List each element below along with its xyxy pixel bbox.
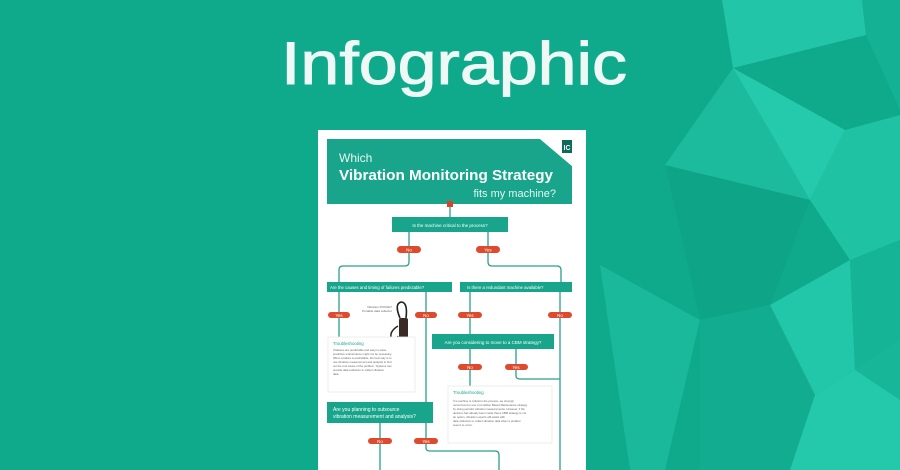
question: causes predictable: Are the causes and timing of failures predictable? xyxy=(330,285,425,290)
start marker xyxy=(447,201,453,207)
icon: portable data collector: Vibration POCKET xyxy=(367,305,392,309)
pills row 2: Yes xyxy=(466,313,474,318)
question: outsource: Are you planning to outsource xyxy=(333,407,400,413)
troubleshooting box right: recommend to use a Condition Based Maintenance strategy xyxy=(453,403,528,407)
troubleshooting box right: by doing periodic vibration measurements. However, if the xyxy=(453,407,525,411)
troubleshooting box left: When a failure is predictable, the best way is to xyxy=(333,356,392,360)
question: CBM strategy xyxy=(432,334,554,349)
question: outsource xyxy=(327,402,433,423)
icon: portable data collector: Portable data collector xyxy=(362,309,392,313)
pills row 1 xyxy=(397,246,500,253)
troubleshooting box right: an option, vibration experts will assist with xyxy=(453,415,505,419)
pills row 1: Yes xyxy=(484,248,492,252)
infographic card xyxy=(318,130,586,470)
pills row 1: No xyxy=(406,248,412,252)
question: redundant machine xyxy=(460,282,572,292)
question: causes predictable xyxy=(327,282,452,292)
question: outsource: vibration measurement and analysis? xyxy=(333,414,416,420)
troubleshooting box left: predictive maintenance might not be necessary. xyxy=(333,352,392,356)
pills row 4 xyxy=(368,438,438,444)
title: Infographic xyxy=(281,30,627,97)
question: CBM strategy: Are you considering to move to a CBM strategy? xyxy=(445,340,542,345)
troubleshooting box right: If a machine is critical to the process, we strongly xyxy=(453,399,514,403)
pills row 2: Yes xyxy=(335,313,343,318)
troubleshooting box left xyxy=(328,337,415,392)
pills row 2: No xyxy=(557,313,563,318)
pills row 2: No xyxy=(423,313,429,318)
troubleshooting box right: decision has already been made that a CBM strategy is not xyxy=(453,411,526,415)
question: machine critical: Is the machine critical to the process? xyxy=(412,223,488,228)
troubleshooting box right: seems to occur. xyxy=(453,423,473,427)
troubleshooting box left: out the root cause of the problem. Systems can xyxy=(333,364,392,368)
troubleshooting box left: provide data collection to collect vibration xyxy=(333,368,384,372)
icon: portable data collector xyxy=(362,302,408,344)
header banner: Vibration Monitoring Strategy xyxy=(339,167,554,184)
pills row 2 xyxy=(328,312,572,318)
pills row 3: Yes xyxy=(512,365,520,370)
troubleshooting box right: data collection to collect vibration data when a problem xyxy=(453,419,522,423)
pills row 3 xyxy=(458,364,528,370)
question: machine critical xyxy=(392,217,508,232)
header banner xyxy=(327,139,572,204)
troubleshooting box right: Troubleshooting xyxy=(453,390,484,395)
connector lines xyxy=(339,207,561,470)
pills row 3: No xyxy=(467,365,473,370)
header banner: fits my machine? xyxy=(473,188,556,200)
troubleshooting box right xyxy=(448,386,552,443)
troubleshooting box left: Troubleshooting xyxy=(333,341,364,346)
troubleshooting box left: data. xyxy=(333,372,339,376)
header banner: Which xyxy=(339,151,372,165)
pills row 4: Yes xyxy=(422,439,430,444)
pills row 4: No xyxy=(377,439,383,444)
background polygon pattern xyxy=(600,0,900,470)
question: redundant machine: Is there a redundant machine available? xyxy=(467,285,544,290)
troubleshooting box left: use vibration measurement and analysis to find xyxy=(333,360,392,364)
troubleshooting box left: If failures are predictable and easy to solve, xyxy=(333,348,387,352)
header banner: IC xyxy=(564,145,570,152)
